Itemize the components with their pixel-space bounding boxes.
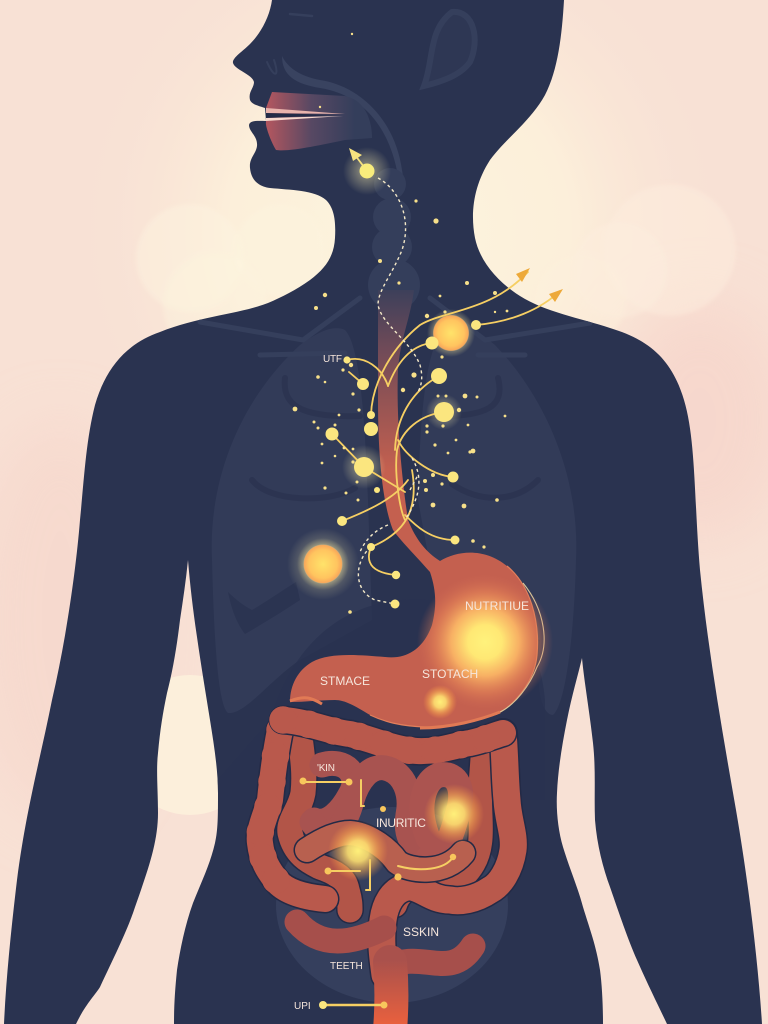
stomach glows xyxy=(417,574,553,719)
chest and lungs xyxy=(200,298,590,1003)
arrowheads xyxy=(349,148,563,302)
throat and mouth cavity xyxy=(266,56,420,311)
large intestine xyxy=(260,720,513,975)
esophagus and stomach xyxy=(290,290,544,728)
dotted pathways xyxy=(358,178,422,604)
labels xyxy=(294,354,529,1012)
nutrient nodes xyxy=(300,164,481,1009)
small intestine xyxy=(297,763,473,1024)
labels: STOTACH xyxy=(422,667,478,681)
labels: 'KIN xyxy=(317,763,335,774)
scattered particles xyxy=(293,33,508,614)
nutrient pathways xyxy=(303,151,560,1005)
labels: NUTRITIUE xyxy=(465,599,529,613)
labels: UTF xyxy=(323,354,342,365)
labels: TEETH xyxy=(330,961,363,972)
labels: UPI xyxy=(294,1001,311,1012)
labels: SSKIN xyxy=(403,925,439,939)
labels: STMACE xyxy=(320,674,370,688)
labels: INURITIC xyxy=(376,816,426,830)
face details: nose, ear, eyebrow xyxy=(267,12,475,86)
floating orbs xyxy=(287,147,484,881)
